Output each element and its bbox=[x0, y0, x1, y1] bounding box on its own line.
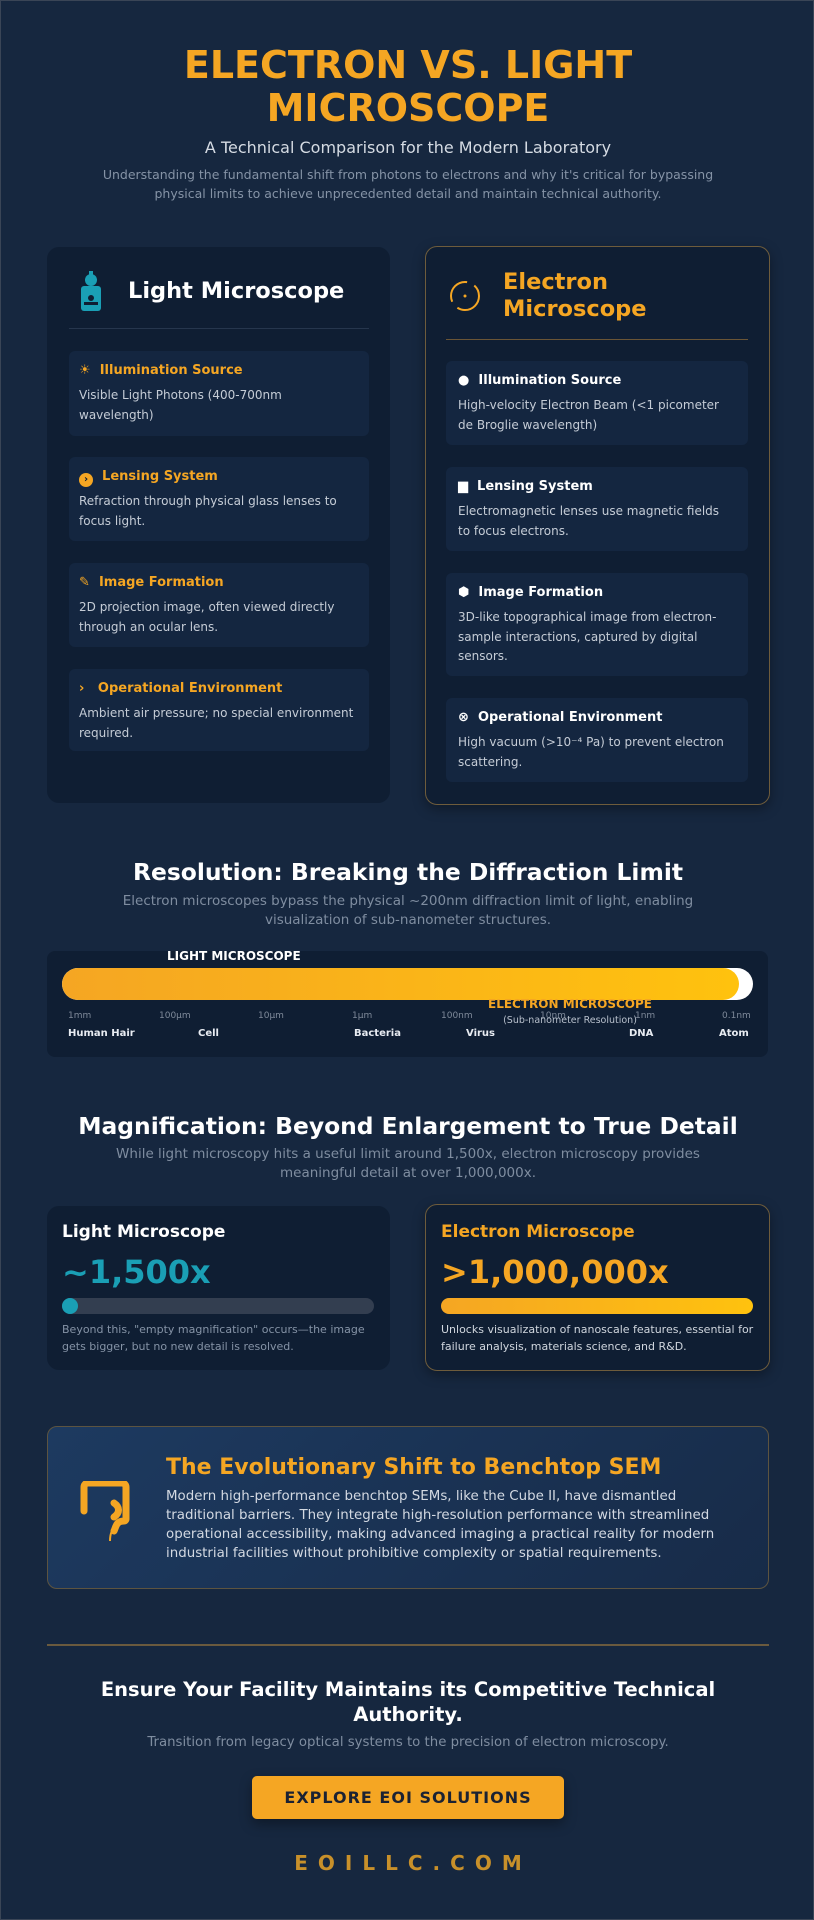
magnification description: meaningful detail at over 1,000,000x. bbox=[280, 1165, 536, 1181]
heading: electron microscope: Electron bbox=[503, 269, 608, 295]
icon: light microscope bbox=[81, 271, 101, 311]
card: light magnification: Beyond this, "empty magnification" occurs—the image bbox=[62, 1323, 365, 1336]
item: electron image formation bbox=[446, 573, 748, 676]
text: 100µm bbox=[159, 1011, 191, 1021]
text: Human Hair bbox=[68, 1028, 135, 1039]
CTA subtext: Transition from legacy optical systems to the precision of electron microscopy. bbox=[147, 1735, 669, 1750]
text: Cell bbox=[198, 1028, 219, 1039]
heading: resolution: Resolution: Breaking the Diffraction Limit bbox=[133, 858, 683, 886]
text: 1mm bbox=[68, 1011, 91, 1021]
text: Bacteria bbox=[354, 1028, 401, 1039]
text: 2D projection image, often viewed directly bbox=[79, 600, 334, 614]
text: through an ocular lens. bbox=[79, 620, 218, 634]
panel: light microscope bbox=[47, 247, 390, 803]
card: light magnification: Light Microscope bbox=[62, 1222, 225, 1242]
text: ⊗ Operational Environment bbox=[458, 710, 662, 725]
text: › Operational Environment bbox=[79, 681, 282, 696]
item: light lensing bbox=[69, 457, 369, 541]
card: electron magnification bbox=[425, 1204, 770, 1371]
intro text bbox=[103, 167, 713, 201]
card: light magnification: ~1,500x bbox=[62, 1253, 211, 1291]
CTA heading: Ensure Your Facility Maintains its Competitive Technical bbox=[101, 1678, 715, 1701]
card: electron magnification: failure analysis, materials science, and R&D. bbox=[441, 1340, 687, 1352]
text: sample interactions, captured by digital bbox=[458, 630, 697, 644]
resolution description: Electron microscopes bypass the physical ~200nm diffraction limit of light, enabling bbox=[123, 893, 693, 909]
text: ⬢ Image Formation bbox=[458, 585, 603, 600]
text: wavelength) bbox=[79, 408, 154, 422]
resolution description: visualization of sub-nanometer structures. bbox=[265, 912, 551, 928]
magnification description: While light microscopy hits a useful limit around 1,500x, electron microscopy provides bbox=[116, 1146, 700, 1162]
chart: resolution scale bbox=[47, 951, 768, 1057]
heading: magnification: Magnification: Beyond Enlargement to True Detail bbox=[78, 1112, 738, 1140]
callout: benchtop SEM: The Evolutionary Shift to Benchtop SEM bbox=[166, 1455, 661, 1480]
text: Electromagnetic lenses use magnetic fields bbox=[458, 504, 719, 518]
callout: benchtop SEM bbox=[47, 1426, 769, 1589]
callout: benchtop SEM: Modern high-performance benchtop SEMs, like the Cube II, have dismantled bbox=[166, 1489, 676, 1504]
text: 100nm bbox=[441, 1011, 473, 1021]
title bbox=[184, 43, 632, 130]
text: Virus bbox=[466, 1028, 495, 1039]
title: ELECTRON VS. LIGHT bbox=[184, 43, 632, 87]
item: electron lensing bbox=[446, 467, 748, 551]
text: required. bbox=[79, 726, 133, 740]
text: (Sub-nanometer Resolution) bbox=[503, 1015, 637, 1026]
CTA heading: Authority. bbox=[353, 1703, 463, 1726]
item: electron illumination bbox=[446, 361, 748, 445]
text: ☀ Illumination Source bbox=[79, 363, 243, 378]
text: sensors. bbox=[458, 649, 508, 663]
text: High-velocity Electron Beam (<1 picometer bbox=[458, 398, 719, 412]
resolution description bbox=[123, 893, 693, 928]
callout: benchtop SEM: operational accessibility, making advanced imaging a practical reality for modern bbox=[166, 1527, 714, 1542]
panel: electron microscope bbox=[425, 246, 770, 805]
footer url: EOILLC.COM bbox=[294, 1851, 532, 1875]
intro text: physical limits to achieve unprecedented detail and maintain technical authority. bbox=[154, 186, 662, 201]
heading: electron microscope bbox=[503, 269, 647, 322]
text: 10nm bbox=[540, 1011, 566, 1021]
text: ● Illumination Source bbox=[458, 373, 621, 388]
text: › bbox=[84, 474, 88, 485]
card: light magnification: gets bigger, but no new detail is resolved. bbox=[62, 1340, 294, 1352]
text: ELECTRON MICROSCOPE bbox=[488, 997, 652, 1011]
text: ▆ Lensing System bbox=[458, 479, 593, 494]
callout: benchtop SEM: industrial facilities without prohibitive complexity or spatial requirements. bbox=[166, 1546, 662, 1561]
text: 10µm bbox=[258, 1011, 284, 1021]
icon: electron bbox=[450, 281, 480, 311]
title: MICROSCOPE bbox=[267, 86, 549, 130]
text: focus light. bbox=[79, 514, 145, 528]
intro text: Understanding the fundamental shift from photons to electrons and why it's critical for bypassing bbox=[103, 167, 713, 182]
card: light magnification bbox=[47, 1206, 390, 1370]
item: light image formation bbox=[69, 563, 369, 647]
callout: benchtop SEM: traditional barriers. They integrate high-resolution performance with streamlined bbox=[166, 1508, 709, 1523]
card: electron magnification: Electron Microscope bbox=[441, 1222, 635, 1242]
item: electron environment bbox=[446, 698, 748, 782]
CTA heading bbox=[101, 1678, 715, 1726]
button bbox=[252, 1776, 564, 1819]
magnification description bbox=[116, 1146, 700, 1181]
item: light environment bbox=[69, 669, 369, 751]
text: Lensing System bbox=[102, 469, 218, 484]
subtitle: A Technical Comparison for the Modern Laboratory bbox=[205, 138, 611, 157]
card: electron magnification: Unlocks visualization of nanoscale features, essential for bbox=[441, 1323, 753, 1336]
heading: light microscope: Light Microscope bbox=[128, 278, 344, 304]
icon: benchtop SEM bbox=[80, 1481, 130, 1541]
text: Ambient air pressure; no special environment bbox=[79, 706, 353, 720]
text: to focus electrons. bbox=[458, 524, 569, 538]
text: High vacuum (>10⁻⁴ Pa) to prevent electron bbox=[458, 735, 724, 749]
text: 3D-like topographical image from electron- bbox=[458, 610, 716, 624]
text: 1µm bbox=[352, 1011, 372, 1021]
text: Refraction through physical glass lenses to bbox=[79, 494, 337, 508]
text: de Broglie wavelength) bbox=[458, 418, 597, 432]
text: ✎ Image Formation bbox=[79, 575, 224, 590]
text: LIGHT MICROSCOPE bbox=[167, 949, 301, 963]
button: EXPLORE EOI SOLUTIONS bbox=[284, 1788, 532, 1807]
text: Visible Light Photons (400-700nm bbox=[79, 388, 282, 402]
text: 1nm bbox=[635, 1011, 655, 1021]
heading: electron microscope: Microscope bbox=[503, 296, 647, 322]
text: 0.1nm bbox=[722, 1011, 751, 1021]
text: DNA bbox=[629, 1028, 653, 1039]
text: Atom bbox=[719, 1028, 749, 1039]
text: scattering. bbox=[458, 754, 522, 768]
item: light illumination bbox=[69, 351, 369, 436]
card: electron magnification: >1,000,000x bbox=[441, 1253, 669, 1291]
